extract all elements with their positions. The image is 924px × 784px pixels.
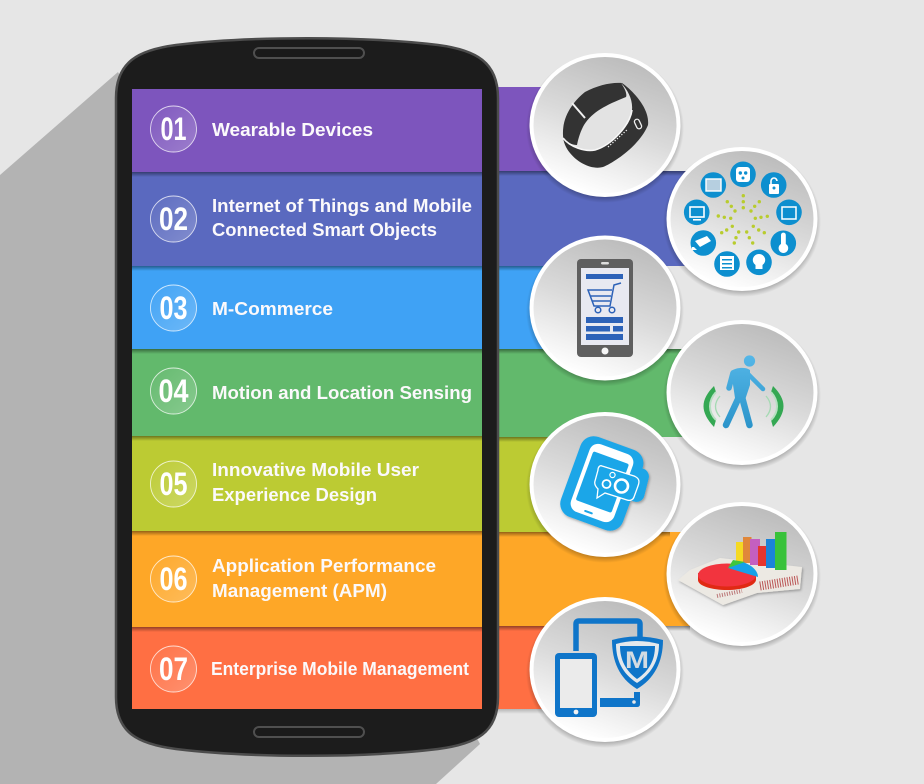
item 05: Experience Design bbox=[212, 485, 377, 505]
item 06: Management (APM) bbox=[212, 581, 387, 601]
item 04: 04 bbox=[158, 373, 189, 409]
item 02: Connected Smart Objects bbox=[212, 220, 437, 240]
phone screen bands bbox=[132, 89, 482, 709]
outer colored ribbons bbox=[490, 87, 700, 714]
item 01: Wearable Devices bbox=[212, 120, 373, 140]
item 06: Application Performance bbox=[212, 556, 436, 576]
item 06 bbox=[150, 556, 436, 602]
icon disc: enterprise mobile management bbox=[526, 597, 684, 748]
item 03: 03 bbox=[160, 290, 188, 326]
item 03 bbox=[150, 285, 333, 331]
bottom speaker bbox=[254, 727, 364, 737]
icon disc: analytics charts bbox=[663, 502, 821, 652]
item 07: 07 bbox=[159, 651, 188, 687]
item 05: 05 bbox=[160, 466, 188, 502]
top speaker bbox=[254, 48, 364, 58]
icon disc: m-commerce phone bbox=[526, 236, 684, 386]
item 02: 02 bbox=[159, 201, 188, 237]
icon disc: motion sensing bbox=[663, 320, 821, 471]
item 01 bbox=[150, 106, 373, 152]
long phone shadow bbox=[0, 72, 480, 784]
item 01: 01 bbox=[160, 111, 186, 147]
item 03: M-Commerce bbox=[212, 299, 333, 319]
phone body bbox=[116, 38, 498, 756]
item 04: Motion and Location Sensing bbox=[212, 383, 472, 403]
icon disc: enterprise mobile management: M bbox=[625, 647, 649, 674]
item 04 bbox=[150, 368, 472, 414]
item 07 bbox=[150, 646, 469, 692]
icon disc: mobile user experience bbox=[526, 412, 684, 563]
item 07: Enterprise Mobile Management bbox=[211, 659, 469, 679]
item 02 bbox=[150, 196, 472, 242]
item 02: Internet of Things and Mobile bbox=[212, 196, 472, 216]
icon disc: internet of things bbox=[663, 147, 821, 297]
item 05: Innovative Mobile User bbox=[212, 460, 419, 480]
item 06: 06 bbox=[160, 561, 188, 597]
icon disc: wearable band bbox=[526, 53, 684, 203]
item 05 bbox=[150, 460, 419, 507]
